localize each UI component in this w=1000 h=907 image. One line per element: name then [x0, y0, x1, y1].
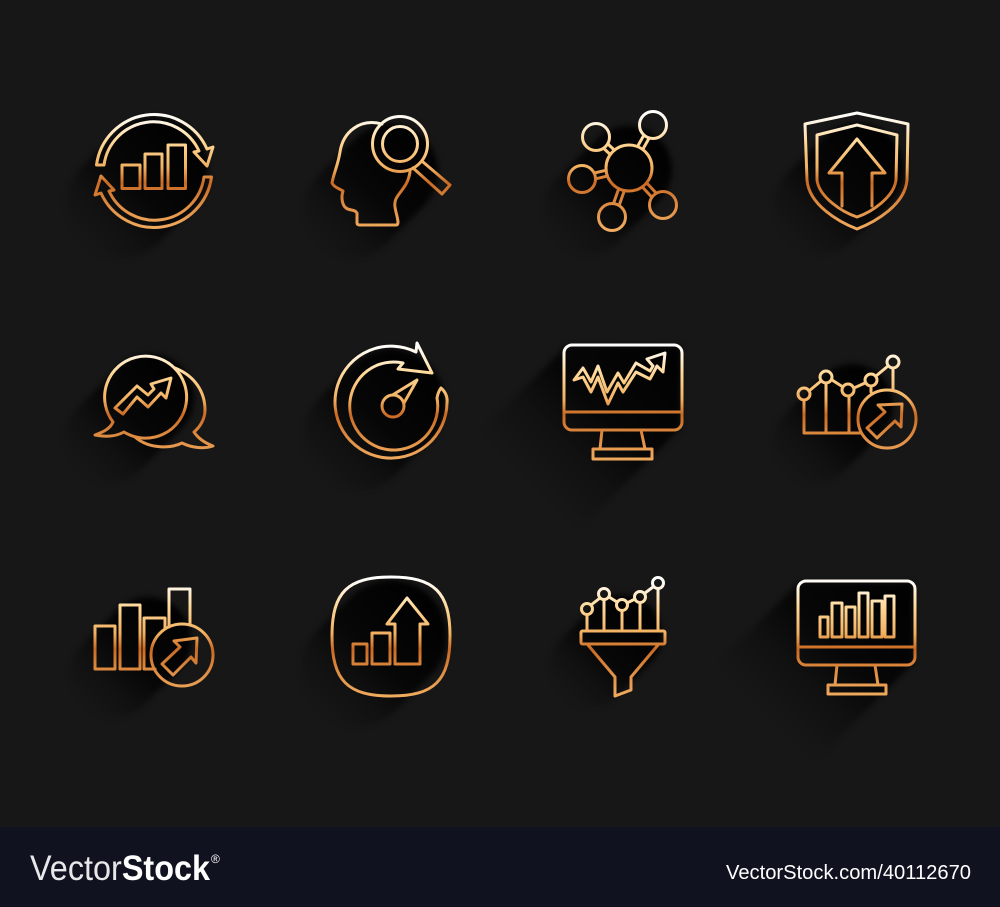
icon: network hub	[568, 112, 676, 230]
footer bar	[0, 827, 1000, 907]
icon: line chart with arrow badge	[798, 356, 916, 448]
icon: speedometer with circular arrow	[335, 343, 447, 458]
long shadows	[44, 95, 954, 760]
registered mark: ®	[211, 852, 220, 866]
icon: refresh arrows around bar chart	[95, 115, 213, 227]
icon: head with magnifying glass	[332, 116, 450, 225]
footer image id: VectorStock.com/40112670	[726, 862, 971, 884]
icon: monitor with trend line	[564, 345, 682, 459]
footer logo: VectorStock	[30, 849, 210, 888]
icon: monitor with bar chart	[798, 581, 915, 694]
icon: speech bubbles with rising arrow	[95, 356, 213, 448]
icon: squircle with bars and up arrow	[332, 577, 450, 696]
icon: shield with up arrow	[805, 113, 908, 229]
icon: funnel with line chart	[581, 578, 665, 696]
icon: bar chart with arrow badge	[95, 589, 213, 686]
